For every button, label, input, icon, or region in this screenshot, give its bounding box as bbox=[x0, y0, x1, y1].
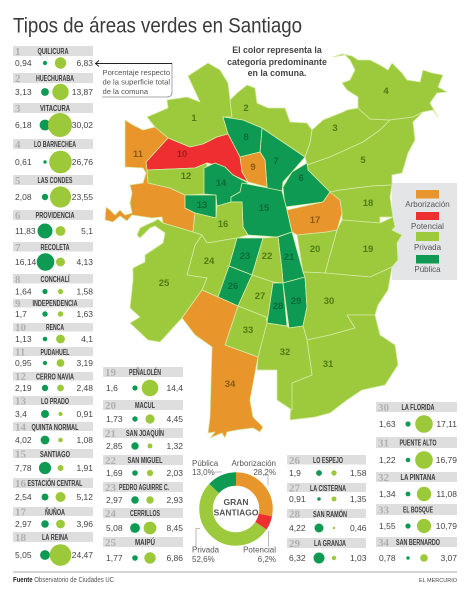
callout: percentage note with arrow bbox=[95, 60, 172, 97]
row 27 La Cisterna: 0,91 bbox=[289, 494, 306, 504]
row 4 Lo Barnechea bbox=[13, 139, 93, 173]
row 5 Las Condes: 23,55 bbox=[72, 192, 93, 202]
row 22 San Miguel: SAN MIGUEL bbox=[128, 456, 163, 465]
row 30 La Florida: 1,63 bbox=[379, 419, 396, 429]
row 22 San Miguel: 1,69 bbox=[106, 468, 123, 478]
map number labels: 5 bbox=[360, 155, 366, 166]
row 11 Pudahuel bbox=[13, 346, 93, 368]
donut chart: Gran Santiago: SANTIAGO bbox=[214, 508, 259, 518]
donut chart: Gran Santiago: GRAN bbox=[223, 497, 249, 507]
row 7 Recoleta: 16,14 bbox=[15, 257, 37, 267]
row 15 Santiago: 15 bbox=[15, 448, 26, 460]
map number labels: 20 bbox=[310, 244, 320, 255]
row 23 Pedro Aguirre C.: PEDRO AGUIRRE C. bbox=[119, 483, 169, 492]
legend panel: Potencial bbox=[411, 222, 444, 231]
row 32 La Pintana bbox=[376, 472, 457, 501]
row 18 La Reina bbox=[13, 532, 93, 566]
map number labels: 26 bbox=[228, 281, 238, 292]
comuna 27 bbox=[238, 275, 273, 323]
row 34 San Bernardo bbox=[376, 537, 457, 563]
map number labels: 32 bbox=[280, 347, 290, 358]
row 6 Providencia: 6 bbox=[15, 210, 21, 222]
row 13 Lo Prado: 0,91 bbox=[76, 409, 93, 419]
row 5 Las Condes bbox=[13, 175, 93, 208]
callout: percentage note with arrow: de la comuna bbox=[102, 87, 149, 96]
row 11 Pudahuel: PUDAHUEL bbox=[40, 348, 70, 357]
comuna 17 bbox=[287, 192, 342, 235]
comuna 13 bbox=[185, 195, 216, 218]
row 26 Lo Espejo: 1,58 bbox=[350, 468, 367, 478]
row 28 San Ramón bbox=[287, 508, 367, 533]
row 16 Estación Central: 16 bbox=[15, 478, 26, 490]
donut chart: Gran Santiago: Arborización bbox=[232, 459, 276, 468]
comuna 4 bbox=[333, 54, 447, 120]
row 8 Conchalí bbox=[13, 274, 93, 296]
comuna 18 bbox=[330, 185, 393, 223]
comuna 16 bbox=[193, 202, 248, 243]
row 15 Santiago: 1,91 bbox=[76, 463, 93, 473]
row 27 La Cisterna: 1,35 bbox=[350, 494, 367, 504]
map number labels: 30 bbox=[324, 296, 334, 307]
row 20 Macul bbox=[103, 400, 183, 424]
row 7 Recoleta: 7 bbox=[15, 242, 21, 254]
donut chart: Gran Santiago bbox=[192, 459, 276, 564]
map number labels: 1 bbox=[191, 113, 197, 124]
row 27 La Cisterna bbox=[287, 482, 367, 504]
map number labels: 10 bbox=[177, 149, 187, 160]
map number labels: 18 bbox=[363, 198, 373, 209]
row 12 Cerro Navia: 2,19 bbox=[15, 383, 32, 393]
row 14 Quinta Normal bbox=[13, 422, 93, 445]
row 13 Lo Prado: LO PRADO bbox=[41, 397, 69, 406]
row 30 La Florida: 17,11 bbox=[436, 419, 457, 429]
row 34 San Bernardo: SAN BERNARDO bbox=[396, 538, 440, 547]
row 24 Cerrillos: CERRILLOS bbox=[130, 509, 160, 518]
row 24 Cerrillos: 8,45 bbox=[166, 523, 183, 533]
row 14 Quinta Normal: 14 bbox=[15, 422, 26, 434]
row 21 San Joaquín: 21 bbox=[105, 428, 116, 440]
row 6 Providencia: PROVIDENCIA bbox=[36, 211, 75, 220]
row 21 San Joaquín: 2,85 bbox=[106, 441, 123, 451]
map number labels: 33 bbox=[243, 325, 253, 336]
map number labels: 24 bbox=[204, 256, 215, 267]
row 4 Lo Barnechea: 26,76 bbox=[72, 157, 93, 167]
legend panel: Arborización bbox=[405, 200, 450, 209]
map number labels: 2 bbox=[243, 103, 249, 114]
row 34 San Bernardo: 0,78 bbox=[379, 553, 396, 563]
row 28 San Ramón: 28 bbox=[289, 508, 300, 520]
row 33 El Bosque bbox=[376, 504, 457, 533]
row 27 La Cisterna: LA CISTERNA bbox=[310, 484, 346, 493]
donut chart: Gran Santiago: Privada bbox=[192, 546, 220, 554]
legend panel: Pública bbox=[414, 265, 441, 274]
row 10 Renca: 4,1 bbox=[81, 334, 93, 344]
legend panel bbox=[392, 183, 457, 280]
comuna 10 bbox=[146, 134, 248, 182]
row 25 Maipú: 1,77 bbox=[106, 553, 123, 563]
comuna 24 bbox=[187, 235, 237, 297]
row 19 Peñalolén: 14,4 bbox=[166, 383, 183, 393]
row 29 La Granja: 1,03 bbox=[350, 553, 367, 563]
row 26 Lo Espejo bbox=[287, 455, 367, 478]
row 1 Quilicura: QUILICURA bbox=[38, 47, 69, 56]
legend panel: Privada bbox=[414, 243, 442, 252]
footer: EL MERCURIO bbox=[419, 578, 458, 584]
donut chart: Gran Santiago: Pública bbox=[192, 459, 219, 468]
row 11 Pudahuel: 3,19 bbox=[76, 358, 93, 368]
row 3 Vitacura: 30,02 bbox=[72, 120, 93, 130]
row 20 Macul: 1,73 bbox=[106, 414, 123, 424]
row 23 Pedro Aguirre C.: 23 bbox=[105, 482, 116, 494]
note: color meaning: El color representa la bbox=[232, 45, 322, 55]
map number labels: 21 bbox=[284, 252, 295, 263]
row 25 Maipú: 6,86 bbox=[166, 553, 183, 563]
row 4 Lo Barnechea: 0,61 bbox=[15, 157, 32, 167]
row 32 La Pintana: 11,08 bbox=[436, 489, 457, 499]
comuna 1 bbox=[147, 63, 232, 147]
row 2 Huechuraba: HUECHURABA bbox=[36, 74, 74, 83]
comuna 33 bbox=[225, 306, 267, 357]
row 12 Cerro Navia: 2,48 bbox=[76, 383, 93, 393]
row 14 Quinta Normal: 4,02 bbox=[15, 435, 32, 445]
row 9 Independencia: 1,7 bbox=[15, 309, 27, 319]
comuna 15 bbox=[231, 183, 292, 237]
row 17 Ñuñoa: ÑUÑOA bbox=[45, 508, 65, 517]
row 3 Vitacura bbox=[13, 103, 93, 137]
map number labels: 8 bbox=[243, 132, 249, 143]
comuna 23 bbox=[229, 238, 263, 275]
row 20 Macul: 4,45 bbox=[166, 414, 183, 424]
row 8 Conchalí: 1,58 bbox=[76, 286, 93, 296]
note: color meaning bbox=[227, 45, 327, 78]
comuna 28 bbox=[267, 283, 287, 326]
row 31 Puente Alto: 31 bbox=[378, 438, 389, 450]
row 22 San Miguel: 22 bbox=[105, 455, 116, 467]
row 24 Cerrillos: 24 bbox=[105, 508, 116, 520]
map number labels: 28 bbox=[273, 301, 283, 312]
row 12 Cerro Navia: CERRO NAVIA bbox=[36, 372, 74, 382]
row 17 Ñuñoa: 3,96 bbox=[76, 519, 93, 529]
row 24 Cerrillos: 5,08 bbox=[106, 523, 123, 533]
donut chart: Gran Santiago: 6,2% bbox=[258, 555, 276, 564]
map number labels: 9 bbox=[250, 162, 256, 173]
row 16 Estación Central: 2,54 bbox=[15, 492, 32, 502]
row 5 Las Condes: 2,08 bbox=[15, 192, 32, 202]
row 9 Independencia: 9 bbox=[15, 298, 21, 310]
row 4 Lo Barnechea: 4 bbox=[15, 139, 21, 151]
row 11 Pudahuel: 11 bbox=[15, 346, 25, 358]
row 33 El Bosque: 1,55 bbox=[379, 521, 396, 531]
row 1 Quilicura: 6,83 bbox=[76, 58, 93, 68]
list: comunas 19 to 25 bbox=[103, 367, 183, 564]
row 27 La Cisterna: 27 bbox=[289, 482, 300, 494]
map number labels bbox=[133, 86, 389, 390]
row 2 Huechuraba: 13,87 bbox=[72, 87, 93, 97]
row 32 La Pintana: LA PINTANA bbox=[400, 473, 436, 482]
map number labels: 14 bbox=[216, 178, 227, 189]
row 7 Recoleta bbox=[13, 242, 93, 271]
donut chart: Gran Santiago: 13,0% bbox=[192, 468, 215, 477]
row 2 Huechuraba bbox=[13, 73, 93, 100]
list: comunas 1 to 18 bbox=[13, 46, 93, 566]
map number labels: 3 bbox=[332, 123, 338, 134]
row 6 Providencia: 5,1 bbox=[81, 226, 93, 236]
row 7 Recoleta: RECOLETA bbox=[40, 243, 70, 252]
row 3 Vitacura: VITACURA bbox=[40, 104, 70, 113]
row 21 San Joaquín: SAN JOAQUÍN bbox=[126, 429, 164, 438]
map number labels: 22 bbox=[262, 251, 272, 262]
row 28 San Ramón: 4,22 bbox=[289, 523, 306, 533]
row 18 La Reina: LA REINA bbox=[42, 533, 68, 542]
comuna 14 bbox=[204, 163, 248, 206]
comuna 3 bbox=[305, 108, 390, 165]
list: comunas 30 to 34 bbox=[376, 402, 457, 563]
donut chart: Gran Santiago: 28,2% bbox=[253, 468, 276, 477]
comuna 25 bbox=[130, 219, 207, 342]
row 10 Renca: 1,13 bbox=[15, 334, 32, 344]
row 1 Quilicura: 0,94 bbox=[15, 58, 32, 68]
row 8 Conchalí: CONCHALÍ bbox=[40, 275, 70, 284]
row 20 Macul: MACUL bbox=[135, 401, 155, 410]
row 8 Conchalí: 1,64 bbox=[15, 286, 32, 296]
row 15 Santiago bbox=[13, 448, 93, 474]
map number labels: 19 bbox=[363, 244, 373, 255]
row 16 Estación Central: ESTACIÓN CENTRAL bbox=[28, 479, 83, 488]
list: comunas 26 to 29 bbox=[287, 455, 367, 564]
callout: percentage note with arrow: Porcentaje respecto bbox=[102, 68, 170, 77]
map of comunas bbox=[105, 54, 447, 438]
row 26 Lo Espejo: LO ESPEJO bbox=[313, 456, 343, 465]
row 22 San Miguel: 2,03 bbox=[166, 468, 183, 478]
row 17 Ñuñoa: 17 bbox=[15, 506, 26, 518]
row 28 San Ramón: 0,46 bbox=[350, 523, 367, 533]
row 2 Huechuraba: 2 bbox=[15, 73, 21, 85]
map number labels: 23 bbox=[240, 251, 250, 262]
row 12 Cerro Navia bbox=[13, 371, 93, 393]
row 19 Peñalolén: 1,6 bbox=[106, 383, 118, 393]
note: color meaning: en la comuna. bbox=[248, 68, 306, 78]
map number labels: 31 bbox=[323, 359, 334, 370]
footer bbox=[13, 572, 458, 584]
row 34 San Bernardo: 3,07 bbox=[440, 553, 457, 563]
row 17 Ñuñoa: 2,97 bbox=[15, 519, 32, 529]
map number labels: 15 bbox=[259, 203, 270, 214]
row 30 La Florida: LA FLORIDA bbox=[402, 403, 435, 412]
comuna 21 bbox=[278, 232, 305, 283]
row 10 Renca bbox=[13, 322, 93, 344]
row 33 El Bosque: EL BOSQUE bbox=[403, 506, 433, 514]
donut chart: Gran Santiago: Potencial bbox=[243, 546, 276, 554]
comuna 30 bbox=[303, 267, 392, 340]
map number labels: 4 bbox=[383, 86, 389, 97]
row 14 Quinta Normal: 1,08 bbox=[76, 435, 93, 445]
row 20 Macul: 20 bbox=[105, 400, 116, 412]
row 15 Santiago: 7,78 bbox=[15, 463, 32, 473]
map number labels: 13 bbox=[197, 200, 207, 211]
row 13 Lo Prado: 13 bbox=[15, 396, 26, 408]
row 29 La Granja bbox=[287, 538, 367, 564]
note: color meaning: categoría predominante bbox=[227, 57, 327, 67]
row 3 Vitacura: 3 bbox=[15, 103, 21, 115]
row 16 Estación Central bbox=[13, 478, 93, 502]
row 31 Puente Alto: 1,22 bbox=[379, 455, 396, 465]
row 32 La Pintana: 1,34 bbox=[379, 489, 396, 499]
footer: Fuente Observatorio de Ciudades UC bbox=[13, 577, 114, 584]
row 31 Puente Alto: PUENTE ALTO bbox=[400, 438, 436, 448]
row 18 La Reina: 24,47 bbox=[72, 550, 93, 560]
row 5 Las Condes: 5 bbox=[15, 175, 21, 187]
row 29 La Granja: 29 bbox=[289, 538, 300, 550]
map number labels: 17 bbox=[310, 215, 320, 226]
donut chart: Gran Santiago: 52,6% bbox=[192, 555, 215, 564]
row 31 Puente Alto: 16,79 bbox=[436, 455, 457, 465]
row 24 Cerrillos bbox=[103, 508, 183, 534]
row 26 Lo Espejo: 1,9 bbox=[289, 468, 301, 478]
row 17 Ñuñoa bbox=[13, 506, 93, 529]
map number labels: 25 bbox=[159, 278, 170, 289]
row 11 Pudahuel: 0,95 bbox=[15, 358, 32, 368]
row 13 Lo Prado: 3,4 bbox=[15, 409, 27, 419]
row 4 Lo Barnechea: LO BARNECHEA bbox=[34, 140, 76, 149]
map number labels: 11 bbox=[133, 149, 144, 160]
row 22 San Miguel bbox=[103, 455, 183, 478]
row 25 Maipú: MAIPÚ bbox=[135, 538, 155, 547]
map number labels: 34 bbox=[225, 379, 236, 390]
row 12 Cerro Navia: 12 bbox=[15, 371, 26, 383]
row 13 Lo Prado bbox=[13, 396, 93, 419]
comuna 22 bbox=[252, 237, 283, 283]
row 29 La Granja: 6,32 bbox=[289, 553, 306, 563]
row 21 San Joaquín: 1,32 bbox=[166, 441, 183, 451]
row 19 Peñalolén: PEÑALOLÉN bbox=[129, 368, 161, 377]
row 16 Estación Central: 5,12 bbox=[76, 492, 93, 502]
row 19 Peñalolén bbox=[103, 367, 183, 396]
comuna 9 bbox=[240, 152, 267, 187]
comuna 2 bbox=[223, 85, 312, 157]
title: Tipos de áreas verdes en Santiago bbox=[13, 12, 302, 38]
row 23 Pedro Aguirre C. bbox=[103, 482, 183, 505]
row 1 Quilicura: 1 bbox=[15, 46, 20, 58]
row 21 San Joaquín bbox=[103, 428, 183, 451]
row 10 Renca: 10 bbox=[15, 322, 26, 334]
comuna 5 bbox=[307, 112, 423, 192]
row 18 La Reina: 5,05 bbox=[15, 550, 32, 560]
comuna 32 bbox=[257, 323, 312, 410]
row 32 La Pintana: 32 bbox=[378, 472, 390, 484]
row 1 Quilicura bbox=[13, 46, 93, 69]
row 18 La Reina: 18 bbox=[15, 532, 26, 544]
row 14 Quinta Normal: QUINTA NORMAL bbox=[32, 423, 79, 432]
comuna 12 bbox=[147, 163, 207, 195]
row 5 Las Condes: LAS CONDES bbox=[38, 176, 73, 185]
row 25 Maipú bbox=[103, 537, 183, 564]
comuna 34 bbox=[182, 290, 263, 438]
comuna 31 bbox=[290, 315, 398, 420]
row 34 San Bernardo: 34 bbox=[378, 537, 390, 549]
comuna 7 bbox=[260, 128, 305, 191]
map number labels: 12 bbox=[181, 171, 191, 182]
row 9 Independencia bbox=[13, 298, 93, 319]
row 6 Providencia: 11,83 bbox=[15, 226, 36, 236]
comuna 29 bbox=[283, 277, 307, 328]
row 30 La Florida bbox=[376, 402, 457, 433]
row 10 Renca: RENCA bbox=[46, 323, 64, 332]
row 23 Pedro Aguirre C.: 2,93 bbox=[166, 495, 183, 505]
row 3 Vitacura: 6,18 bbox=[15, 120, 32, 130]
comuna 26 bbox=[218, 266, 252, 306]
map number labels: 16 bbox=[218, 219, 228, 230]
row 15 Santiago: SANTIAGO bbox=[40, 450, 70, 459]
row 7 Recoleta: 4,13 bbox=[76, 257, 93, 267]
callout: percentage note with arrow: de la superficie total bbox=[102, 78, 170, 86]
comuna 8 bbox=[223, 117, 262, 157]
row 25 Maipú: 25 bbox=[105, 537, 116, 549]
row 6 Providencia bbox=[13, 210, 93, 238]
row 2 Huechuraba: 3,13 bbox=[15, 87, 32, 97]
row 30 La Florida: 30 bbox=[378, 402, 390, 414]
comuna 20 bbox=[297, 230, 337, 273]
map number labels: 27 bbox=[255, 291, 265, 302]
row 9 Independencia: INDEPENDENCIA bbox=[32, 299, 78, 308]
row 19 Peñalolén: 19 bbox=[105, 367, 116, 379]
row 26 Lo Espejo: 26 bbox=[289, 455, 300, 467]
map number labels: 6 bbox=[298, 173, 304, 184]
map number labels: 7 bbox=[273, 156, 279, 167]
row 23 Pedro Aguirre C.: 2,97 bbox=[106, 495, 123, 505]
row 9 Independencia: 1,63 bbox=[76, 309, 93, 319]
row 8 Conchalí: 8 bbox=[15, 274, 21, 286]
comuna 11 bbox=[105, 120, 195, 232]
row 29 La Granja: LA GRANJA bbox=[314, 539, 346, 548]
row 28 San Ramón: SAN RAMÓN bbox=[313, 510, 347, 519]
comuna 6 bbox=[283, 163, 330, 207]
row 33 El Bosque: 33 bbox=[378, 504, 390, 516]
row 31 Puente Alto bbox=[376, 437, 457, 469]
row 33 El Bosque: 10,79 bbox=[436, 521, 457, 531]
comuna 19 bbox=[325, 217, 402, 277]
map number labels: 29 bbox=[291, 296, 301, 307]
